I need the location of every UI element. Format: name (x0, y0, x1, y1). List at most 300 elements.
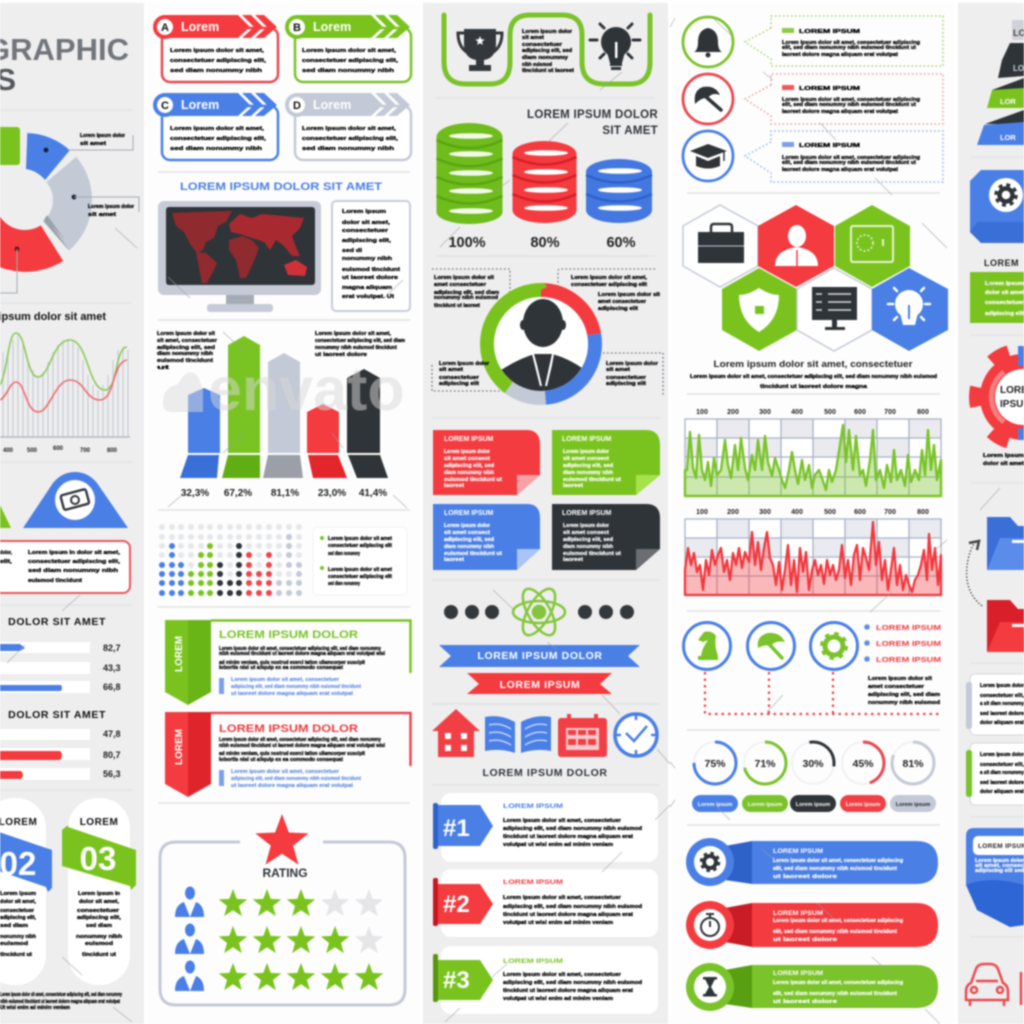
callout: umbrella (683, 74, 943, 124)
blue tag card: adipiscing elit sed (975, 868, 1024, 874)
progress ring 75%: 75% (704, 758, 726, 770)
green box (970, 272, 1024, 323)
card D: consectetuer adipiscing elit, (302, 136, 399, 142)
section: red bookmark: LOREM (174, 729, 185, 765)
bar: gray (263, 353, 303, 499)
icon: house (432, 709, 480, 757)
label: blue: Lorem ipsum dolor (80, 133, 126, 139)
rank card 2: LOREM IPSUM (503, 879, 563, 886)
values: 47,8 (103, 729, 121, 739)
folders (967, 517, 1024, 652)
text box: red outline: elit, (0, 559, 13, 565)
values: 56,3 (103, 769, 121, 779)
dot chart legend: consectetuer adipiscing elit (328, 574, 392, 580)
labels: amet consectetuer (434, 282, 487, 288)
series: green (0, 333, 127, 390)
caption: LOREM (984, 258, 1019, 268)
banner: green hourglass: ut laoreet dolore (773, 999, 837, 1005)
card C (153, 93, 278, 160)
section: red bookmark: nibh euismod tincidunt ut laoreet dolore magna aliquam erat volutpat wisi (219, 743, 385, 749)
pill card 02: nonummy nibh (0, 934, 36, 940)
heading: DOLOR SIT AMET (8, 616, 106, 628)
badge: C (161, 100, 169, 112)
panel: column 3 background (423, 3, 668, 1024)
section: red bookmark: adipiscing elit, sed diam nonummy nibh euismod tincidunt (231, 776, 361, 782)
note card: red: LOREM IPSUM (444, 436, 494, 443)
icon: clock (615, 714, 657, 756)
dot matrix chart (159, 524, 302, 596)
labels: adipiscing elit, sed diam (434, 290, 499, 296)
pill labels (692, 795, 936, 812)
axis labels (696, 409, 929, 416)
rank card 3: adipiscing elit, sed diam nonummy nibh euismod (503, 980, 642, 986)
labels: tincidunt ut laoreet (434, 303, 480, 309)
callout: bell: Lorem ipsum dolor sit amet, consectetuer adipiscing (782, 40, 920, 46)
pill card 03: tincidunt ut (82, 952, 116, 958)
icon row (432, 709, 657, 779)
ribbon: blue: LOREM IPSUM DOLOR (477, 650, 603, 662)
heading: RATING (262, 866, 308, 880)
labels: adipiscing elit (439, 381, 479, 387)
pill card 02: dolor sit amet, (0, 899, 36, 905)
labels: Lorem ipsum dolor sit (598, 292, 660, 298)
axis labels: 100 (696, 409, 708, 416)
labels: sit amet (439, 367, 463, 373)
rank card 3: Lorem ipsum dolor sit amet, consectetuer (503, 972, 622, 978)
text box: red outline: dolor, (0, 550, 12, 556)
pill card 02: 02 (0, 845, 36, 882)
panel: column 2 background (147, 3, 420, 1024)
heading: map section: LOREM IPSUM DOLOR SIT AMET (180, 181, 382, 193)
card A: Lorem (181, 20, 219, 34)
note card: dark: LOREM IPSUM (562, 510, 612, 517)
note card: blue: euismod tincidunt ut (444, 551, 502, 557)
axis labels: 800 (917, 409, 929, 416)
labels: Lorem ipsum dolor sit amet, (571, 275, 648, 281)
dot chart legend: Lorem ipsum dolor sit amet (328, 536, 392, 542)
series: red (0, 360, 127, 412)
note card: red: laoreet (444, 483, 464, 489)
axis labels: 200 (727, 509, 739, 516)
banner: blue gear: elit, sed diam nonummy nibh euismod tincidunt (773, 866, 897, 872)
card B: sed diam nonummy nibh (302, 68, 394, 74)
dots and atom (444, 584, 634, 640)
row 3 (175, 960, 383, 991)
label: gray: sit amet (88, 212, 116, 218)
icon: stopwatch (701, 914, 719, 936)
banner: red timer (686, 901, 938, 949)
green box: dolor sit amet (985, 290, 1024, 296)
axis labels: 600 (53, 446, 64, 452)
icon: gear (810, 622, 858, 670)
green box: adipiscing elit (985, 311, 1024, 317)
rank card 1: volutpat ut wisi enim ad minim veniam (503, 842, 613, 848)
axis labels: 500 (824, 409, 836, 416)
card C: Lorem (181, 98, 219, 112)
icon: graduation cap (683, 131, 733, 181)
section: green bookmark (165, 620, 410, 705)
progress ring 71% (744, 742, 786, 784)
pill: gray (890, 795, 936, 812)
pill card 03 (62, 798, 136, 985)
note card: red: sit amet consect (444, 456, 490, 462)
bar notes: ut laoreet dolore (315, 352, 367, 358)
axis labels: 500 (824, 509, 836, 516)
note card: green: sit amet consect (563, 456, 609, 462)
axis labels: 600 (854, 509, 866, 516)
section: red bookmark (165, 712, 410, 797)
progress ring 30% (789, 739, 837, 787)
banner: red timer: ut laoreet dolore (773, 937, 837, 943)
text card: gray marker: consectetuer elit, (980, 693, 1024, 699)
badge: green (0, 505, 11, 528)
bar notes (157, 331, 405, 371)
card D: Lorem (313, 98, 351, 112)
text: Lorem ipsum dolor (522, 29, 573, 35)
section: green bookmark: LOREM (174, 636, 185, 672)
rank card 2: adipiscing elit, sed diam nonummy nibh euismod (503, 904, 642, 910)
note card: blue: adipiscing elit, sed (444, 537, 494, 543)
progress ring 30%: 30% (802, 758, 824, 770)
labels: sit amet (606, 367, 630, 373)
banner: blue gear: Lorem ipsum dolor sit amet, consectetuer adipiscing (773, 858, 903, 864)
progress ring 75% (694, 742, 736, 784)
pill: dark: Lorem ipsum (796, 802, 830, 808)
icon: bell (683, 17, 733, 67)
label: gray (88, 204, 135, 218)
bar: gray: 81,1% (271, 488, 299, 499)
banner: blue gear (686, 838, 938, 886)
callout: graduation cap: elit, sed diam nonummy nibh euismod tincidunt ut (782, 160, 916, 166)
banner (163, 15, 277, 38)
heading: DOLOR SIT AMET (8, 709, 106, 721)
pill card 02: sed diam (0, 923, 28, 929)
badge: A (161, 22, 169, 34)
card D: sed diam nonummy nibh (302, 146, 394, 152)
note card: blue: LOREM IPSUM (444, 510, 494, 517)
icon: cash exchange (55, 480, 95, 520)
row 1 (175, 886, 383, 917)
banner: green hourglass: elit, sed diam nonummy nibh euismod tincidunt (773, 991, 897, 997)
bar notes: adipiscing elit, sed (157, 345, 215, 351)
labels (434, 275, 660, 387)
pill card 02: Lorem ipsum (0, 891, 36, 897)
progress ring 81% (892, 742, 934, 784)
tag: #2 (443, 891, 470, 918)
ribbon (0, 831, 52, 892)
note card: blue (433, 504, 540, 570)
axis labels: 100 (696, 509, 708, 516)
note card: green: LOREM IPSUM (562, 436, 612, 443)
section: green bookmark: ad minim veniam, quis nostrud exerci tation ullamcorper suscipit (219, 660, 365, 666)
text box: map description: nonummy nibh (342, 256, 392, 262)
connectors (705, 672, 941, 714)
stack: blue (586, 159, 652, 251)
icon: atom (513, 584, 565, 640)
progress ring 71%: 71% (754, 758, 776, 770)
icon: car (966, 964, 1008, 1006)
pill: blue: Lorem ipsum (698, 802, 732, 808)
note card: red: adipiscing elit, sed (444, 463, 494, 469)
pyramid: LO (1013, 64, 1024, 73)
dot chart legend (313, 527, 407, 595)
text box: map description: Lorem ipsum (342, 209, 386, 215)
callout: umbrella: LOREM IPSUM (799, 86, 861, 92)
text: nonummy nibh euismod (868, 700, 940, 706)
banner: red timer: LOREM IPSUM (773, 910, 823, 917)
card A: consectetuer adipiscing elit, (170, 58, 267, 64)
bar notes: sit amet, consectetuer (157, 338, 218, 344)
bar: green (222, 336, 260, 499)
section: red bookmark: ut laoreet dolore magna aliquam erat volutpat (231, 783, 353, 789)
badge: blue (23, 472, 128, 528)
bar notes: diam nonummy nibh (157, 351, 213, 357)
bar: dark (347, 369, 388, 499)
blue tag card: Lorem ipsum dolor (975, 858, 1024, 864)
note card: red: diam nonummy nibh (444, 470, 494, 476)
rank card 3 (433, 946, 658, 1014)
label: gray: Lorem ipsum dolor (88, 204, 135, 210)
bullet list: LOREM IPSUM (876, 623, 941, 632)
card B: Lorem (313, 20, 351, 34)
bar: green: 67,2% (224, 488, 252, 499)
bar: blue (180, 388, 220, 499)
hexagon grid (683, 205, 948, 351)
text card: gray marker (966, 674, 1024, 735)
note card: dark: diam nonummy nibh (563, 544, 613, 550)
banner (296, 15, 410, 38)
ribbon (62, 825, 136, 890)
folder: red (987, 600, 1024, 652)
donut chart (0, 127, 139, 293)
note card: blue: diam nonummy nibh (444, 544, 494, 550)
text box: red outline (0, 541, 130, 593)
icon: calendar (558, 714, 607, 757)
text card: green marker (966, 743, 1024, 805)
pill card 02: adipiscing elit, (0, 915, 36, 921)
green box: consectetuer (985, 300, 1024, 306)
card D (285, 93, 411, 160)
panel: column 5 background (958, 3, 1024, 1024)
text: nibh euismod (522, 62, 552, 68)
icon: umbrella (683, 74, 733, 124)
gear diagram (975, 346, 1024, 467)
hex caption: Lorem ipsum dolor sit amet, consectetuer adipiscing elit, sed diam nonummy nibh euismod (690, 374, 937, 380)
pill: green (742, 795, 788, 812)
note card: green (552, 430, 660, 495)
caption: LOREM IPSUM DOLOR (482, 767, 608, 779)
pill card 02 (0, 798, 52, 985)
callout: graduation cap (683, 131, 943, 182)
watermark: envato (208, 355, 405, 423)
labels: adipiscing elit (606, 381, 646, 387)
note card: green: euismod tincidunt ut (563, 477, 621, 483)
icon: hourglass (703, 977, 717, 996)
callout: umbrella: laoreet dolore magna aliquam erat volutpat (782, 109, 898, 115)
values: 80,7 (103, 750, 121, 760)
callout: bell: LOREM IPSUM (799, 29, 861, 35)
blue tag card (966, 828, 1024, 927)
badge: D (293, 100, 301, 112)
text (868, 676, 940, 706)
values: 82,7 (103, 643, 121, 653)
footer note: nibh euismod tincidunt ut laoreet dolore magna aliquam erat volutpat (0, 999, 120, 1005)
pill card 03: LOREM (80, 817, 118, 828)
strategy icons with connectors (684, 622, 941, 714)
section: green bookmark: Lorem ipsum dolor sit amet, consectetuer (231, 677, 339, 683)
world map (172, 211, 307, 283)
pill card 03: Lorem ipsum in (78, 891, 120, 897)
labels: adipiscing elit (598, 306, 638, 312)
card B (285, 15, 411, 82)
callout: bell (683, 16, 943, 67)
note card: red (433, 430, 540, 495)
ribbon: blue (439, 645, 640, 667)
card C: Lorem ipsum dolor sit amet, (170, 126, 265, 132)
card B: consectetuer adipiscing elit, (302, 58, 399, 64)
footer note: Ut wisi enim ad minim veniam (0, 1005, 70, 1011)
heading: stacks: LOREM IPSUM DOLOR (527, 109, 658, 121)
text box: map description: euismod tincidunt (342, 267, 400, 273)
note card: dark: euismod tincidunt ut (563, 551, 621, 557)
bar notes: Lorem ipsum dolor sit amet, (315, 331, 392, 337)
text box: map description: magna aliquam (342, 285, 392, 291)
banner: red timer: elit, sed diam nonummy nibh euismod tincidunt (773, 929, 897, 935)
dotted connectors (432, 269, 663, 395)
person donut (432, 269, 663, 398)
labels: amet consectetuer (598, 299, 647, 305)
pill: red: Lorem ipsum (846, 802, 880, 808)
callout: graduation cap: Lorem ipsum dolor sit amet, consectetuer adipiscing (782, 155, 920, 161)
tag: #3 (443, 967, 470, 994)
bar notes: euismod tincidunt (157, 358, 213, 364)
card A: sed diam nonummy nibh (170, 68, 262, 74)
dot chart legend: consectetuer adipiscing elit (328, 543, 392, 549)
card B: Lorem ipsum dolor sit amet, (302, 48, 397, 54)
hex: monitor (797, 268, 872, 351)
axis labels: 400 (791, 509, 803, 516)
segment: gray (43, 157, 92, 251)
bullet list: LOREM IPSUM (876, 639, 941, 648)
rank card 2: Lorem ipsum dolor sit amet, consectetuer (503, 895, 622, 901)
card A: Lorem ipsum dolor sit amet, (170, 48, 265, 54)
text: adipiscing elit, sed (522, 48, 572, 54)
line chart (0, 311, 130, 454)
text box: map description: sed di (342, 248, 363, 254)
pill card 02: tincidunt ut (0, 952, 32, 958)
icon: businessman (501, 299, 585, 395)
key block with gear (970, 170, 1024, 323)
progress bars: blue (0, 616, 121, 693)
bar: red: 23,0% (318, 488, 346, 499)
dot chart legend: Lorem ipsum dolor sit amet (328, 567, 392, 573)
pill card 03: dolor sit amet, (79, 899, 120, 905)
labels: consectetuer adipiscing elit (571, 282, 647, 288)
bullet list (864, 623, 941, 664)
text: Lorem ipsum dolor sit (868, 676, 932, 682)
hex caption: Lorem ipsum dolor sit amet, consectetuer (714, 359, 913, 370)
note card: green: adipiscing elit, sed (563, 463, 613, 469)
dot chart legend: sed diam nonummy (328, 581, 360, 587)
icon: red star (255, 814, 309, 865)
bar notes: ut (157, 365, 169, 371)
heading: LOREM IPSUM DOLOR (219, 723, 358, 735)
labels: nonummy nibh euismod (434, 295, 498, 301)
title (0, 32, 129, 97)
callout: graduation cap: laoreet dolore magna aliquam erat volutpat (782, 167, 898, 173)
axis labels: 700 (884, 509, 896, 516)
hex: briefcase (683, 205, 758, 287)
area chart: green (685, 409, 941, 496)
bar: red (307, 404, 347, 499)
rank card 3: tincidunt ut laoreet dolore magna aliquam erat (503, 988, 633, 994)
note card: green: laoreet (563, 483, 583, 489)
progress ring 45% (842, 742, 884, 784)
rank card 1: adipiscing elit, sed diam nonummy nibh euismod (503, 826, 642, 832)
footer note (0, 992, 122, 1011)
gear diagram: dolor sit amet (983, 461, 1024, 467)
tag (433, 803, 493, 849)
axis labels: 700 (884, 409, 896, 416)
arrow: dashed curve (967, 541, 982, 606)
axis labels (696, 509, 929, 516)
pill card 02: euismod (0, 941, 28, 947)
ribbon: red: LOREM IPSUM (500, 679, 580, 691)
triangle badges (0, 472, 128, 528)
values: 66,8 (103, 682, 121, 692)
axis labels: 800 (107, 448, 118, 454)
note card: dark (552, 504, 660, 570)
icon: book (485, 716, 551, 753)
section: green bookmark: nibh euismod tincidunt ut laoreet dolore magna aliquam erat volutpat wisi (219, 651, 385, 657)
tab (165, 620, 188, 705)
rank card 3: volutpat ut wisi enim ad minim veniam (503, 996, 613, 1002)
gear diagram: Lorem ipsum (983, 453, 1024, 459)
stack: red (512, 141, 576, 251)
panel: column 4 background (670, 3, 955, 1024)
progress ring 81%: 81% (902, 758, 924, 770)
banner: green hourglass: Lorem ipsum dolor sit amet, consectetuer adipiscing (773, 980, 903, 986)
icon: umbrella (748, 622, 794, 670)
text: diam nonummy (522, 55, 568, 61)
bar chart (157, 331, 405, 499)
axis labels: 200 (727, 409, 739, 416)
card A (153, 15, 278, 82)
pyramid: LOR (1000, 133, 1016, 142)
callout: bell: elit, sed diam nonummy nibh euismod tincidunt ut (782, 45, 916, 51)
banner: green hourglass (686, 963, 938, 1011)
note card: dark: laoreet (563, 557, 583, 563)
section: red bookmark: Lorem ipsum dolor sit amet, consectetuer adipiscing elit, sed diam nonummy (219, 737, 381, 743)
icon: trophy (458, 29, 502, 71)
pill: green: Lorem ipsum (748, 802, 782, 808)
progress ring 45%: 45% (852, 758, 874, 770)
pill: red (840, 795, 886, 812)
axis labels: 400 (3, 448, 14, 454)
segment: red (0, 215, 63, 272)
text box: map description: dolor sit amet, (342, 220, 391, 226)
section: red bookmark: lobortis nisl ut aliquip ex ea commodo consequat (219, 757, 343, 763)
bar notes: Lorem ipsum dolor sit (157, 331, 215, 337)
heading: LOREM IPSUM DOLOR (219, 629, 358, 641)
note card: green: diam nonummy nibh (563, 470, 613, 476)
note card: blue: Lorem ipsum dolor (444, 523, 491, 529)
section: green bookmark: ut laoreet dolore magna aliquam erat volutpat (231, 691, 353, 697)
folder: blue (987, 517, 1024, 570)
section: green bookmark: Lorem ipsum dolor sit amet, consectetuer adipiscing elit, sed diam nonummy (219, 646, 381, 652)
labels: consectetuer (439, 375, 480, 381)
pill card 03: consectetuer (77, 908, 120, 914)
